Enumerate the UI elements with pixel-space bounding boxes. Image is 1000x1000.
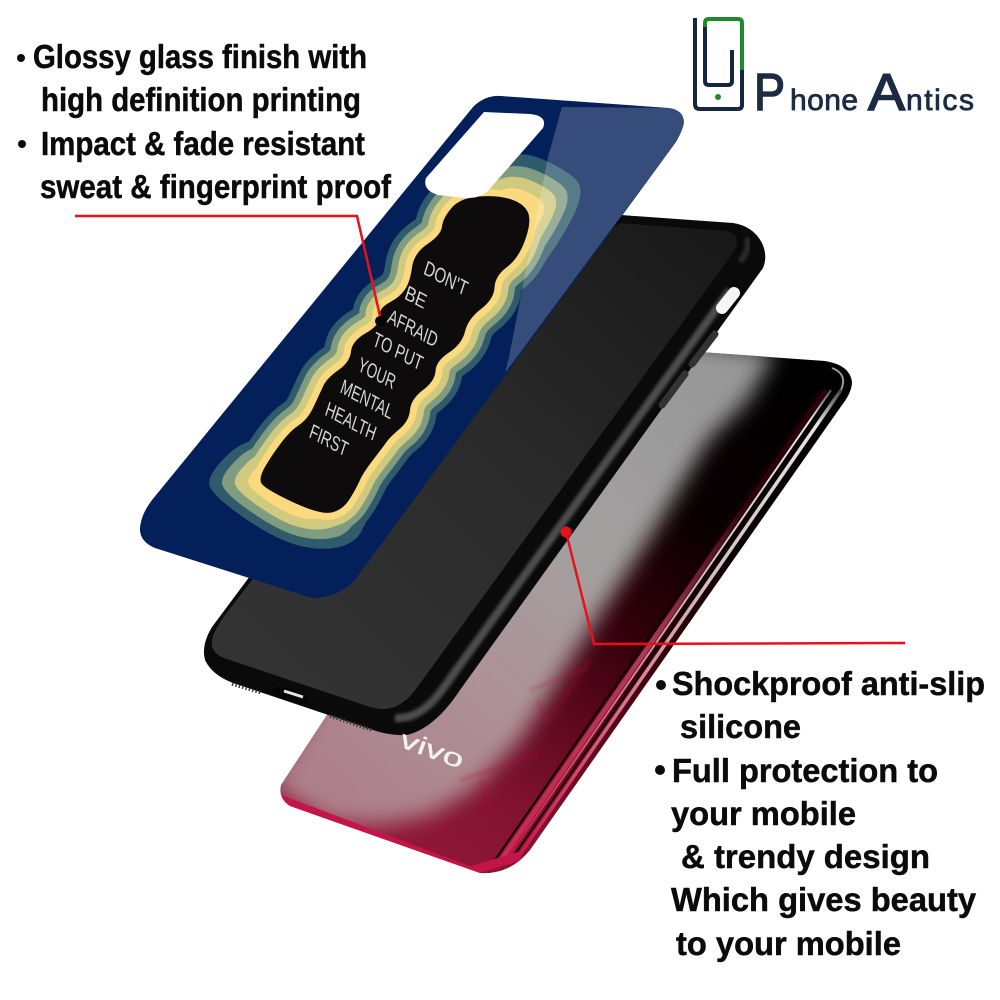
icon: phone outline	[695, 18, 742, 109]
text block: glass features: high definition printing	[41, 81, 361, 118]
phone back with red gradient	[270, 340, 870, 890]
black wave shape	[261, 196, 529, 513]
callout line: silicone	[560, 526, 905, 644]
case corner shading	[740, 238, 748, 262]
text block: silicone features: Shockproof anti-slip	[672, 665, 985, 702]
logo wordmark: hone	[790, 84, 858, 117]
case screen area	[212, 223, 737, 709]
panel message: DON'T	[421, 257, 470, 301]
speaker grilles	[232, 684, 372, 730]
glossy rim lines	[495, 368, 843, 860]
red web pattern on phone back	[460, 660, 590, 813]
text block: glass features: sweat & fingerprint proof	[40, 168, 392, 205]
crimson bottom edge	[279, 799, 520, 871]
panel message: YOUR	[355, 354, 398, 394]
black silicone case	[204, 215, 765, 735]
panel message: MENTAL	[338, 376, 396, 424]
panel message: AFRAID	[385, 306, 440, 352]
text block: glass features: Glossy glass finish with	[33, 38, 367, 75]
glass highlight	[505, 107, 684, 373]
brand on phone back: vivo	[396, 726, 468, 774]
side buttons	[662, 334, 715, 405]
camera cutout	[425, 112, 544, 198]
panel message: TO PUT	[370, 329, 425, 375]
text block: silicone features: silicone	[680, 708, 801, 745]
case side stripe	[395, 290, 730, 718]
logo wordmark: ntics	[906, 84, 974, 117]
charging port	[271, 683, 311, 707]
panel message: BE	[402, 282, 429, 314]
camera slot	[722, 293, 734, 308]
logo wordmark	[754, 64, 974, 122]
logo wordmark: P	[754, 64, 785, 122]
callout line: glass finish	[75, 216, 385, 326]
text block: silicone features: Full protection to	[672, 752, 938, 789]
printed glass panel	[140, 96, 684, 598]
panel message: FIRST	[307, 421, 351, 461]
panel message	[307, 257, 470, 461]
logo: Phone Antics	[695, 18, 974, 122]
text block: silicone features: & trendy design	[681, 838, 930, 875]
panel message: HEALTH	[323, 398, 379, 446]
text block: glass features	[17, 38, 392, 205]
text block: silicone features: your mobile	[671, 795, 856, 832]
text block: silicone features: to your mobile	[676, 925, 901, 962]
text block: silicone features	[655, 665, 985, 962]
text block: silicone features: Which gives beauty	[671, 881, 977, 918]
wavy contour layers	[210, 155, 579, 548]
text block: glass features: Impact & fade resistant	[41, 125, 365, 162]
logo wordmark: A	[868, 64, 905, 122]
